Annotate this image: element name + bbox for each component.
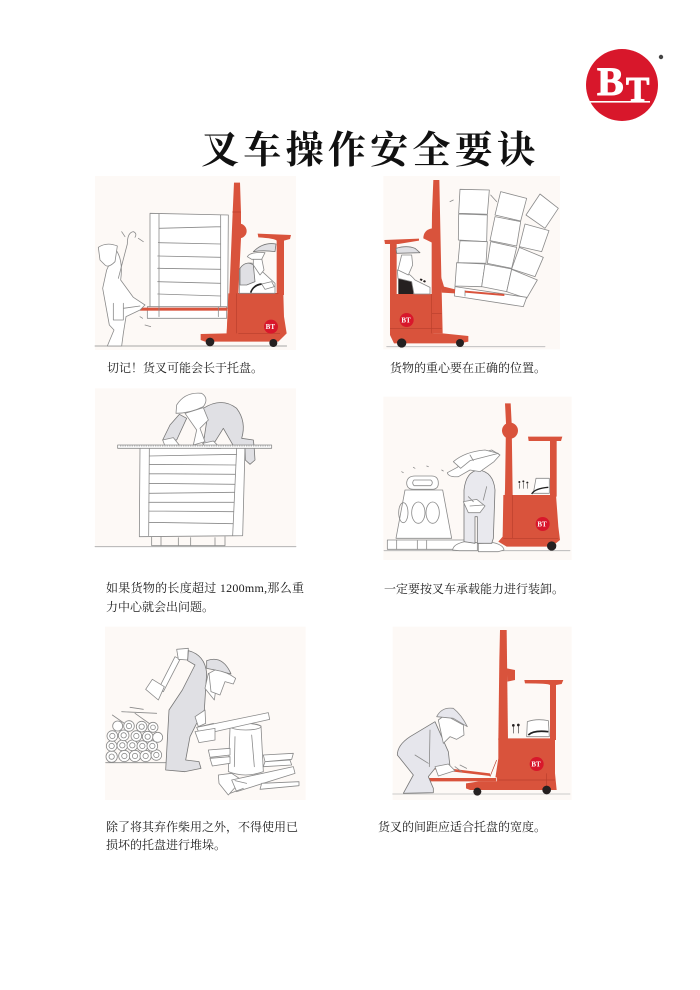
man chopping <box>166 651 236 772</box>
woman with umbrella <box>98 232 151 346</box>
crate <box>139 448 245 537</box>
forklift logo <box>264 320 278 334</box>
forklift <box>423 630 563 796</box>
log pile <box>106 707 163 762</box>
weight <box>387 476 467 549</box>
plank <box>118 445 272 448</box>
logo: BT: T <box>626 70 649 109</box>
forklift <box>498 403 562 551</box>
caption 4: 一定要按叉车承载能力进行装卸。 <box>384 581 564 596</box>
caption 5 <box>106 819 298 852</box>
man bending <box>397 708 467 793</box>
panel: forks longer than pallet <box>95 176 296 350</box>
title: 叉车操作安全要诀 <box>201 119 535 174</box>
caption 3: 如果货物的长度超过 1200mm,那么重 <box>106 580 304 595</box>
forklift logo <box>530 757 544 771</box>
forklift logo: BT <box>537 520 547 528</box>
caption 2: 货物的重心要在正确的位置。 <box>390 360 546 375</box>
forklift logo <box>400 313 414 327</box>
axe <box>146 648 188 700</box>
forklift logo: BT <box>266 323 275 331</box>
pallet feet <box>152 537 225 546</box>
panel: damaged pallets <box>105 627 306 800</box>
panel: centre of gravity <box>383 176 560 349</box>
caption 1: 切记！货叉可能会长于托盘。 <box>107 360 263 375</box>
boards <box>195 713 299 795</box>
panel: fork spacing <box>393 627 572 800</box>
logo: BT <box>586 49 663 121</box>
driver <box>396 247 430 294</box>
caption 5: 损坏的托盘进行堆垛。 <box>106 837 226 852</box>
forklift <box>201 183 291 347</box>
caption 6: 货叉的间距应适合托盘的宽度。 <box>378 819 546 834</box>
driver <box>239 244 276 293</box>
panel: load capacity <box>383 397 572 560</box>
forklift logo <box>536 517 550 531</box>
logo: BT: B <box>597 59 624 104</box>
forklift logo: BT <box>401 316 411 324</box>
caption 5: 除了将其弃作柴用之外，不得使用已 <box>106 819 298 834</box>
forklift logo: BT <box>531 760 541 768</box>
caption 3: 力中心就会出问题。 <box>106 599 214 614</box>
caption 3 <box>106 580 304 614</box>
forklift <box>384 180 468 348</box>
man scratching head <box>402 450 504 552</box>
man leaning over load <box>163 393 255 464</box>
crate on forks <box>140 213 228 318</box>
tilted load <box>450 189 558 307</box>
chopping block <box>228 723 263 775</box>
panel: oversized load <box>95 388 296 547</box>
